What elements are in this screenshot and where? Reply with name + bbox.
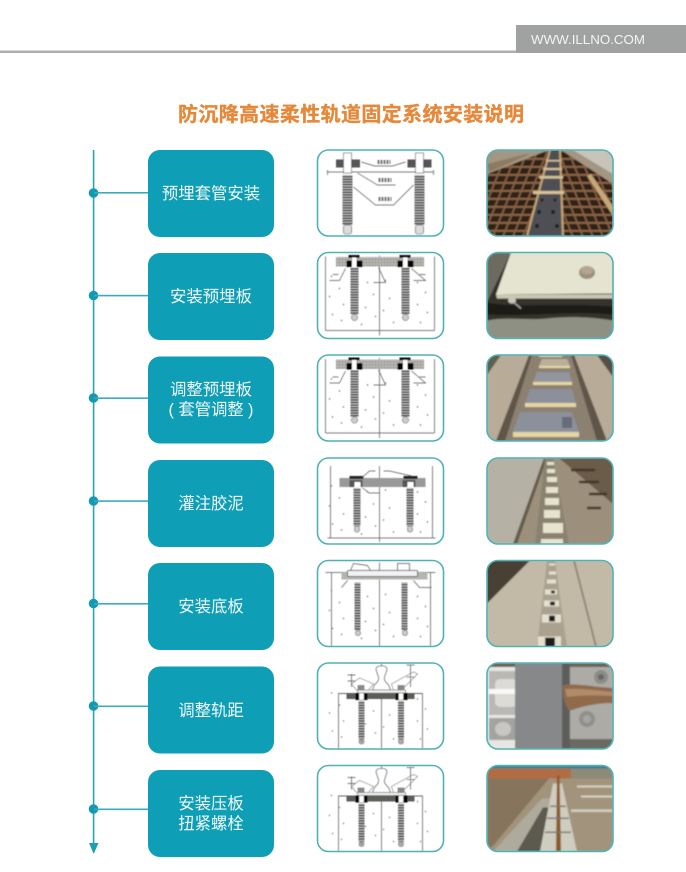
photo 6: rail and gauge tool bbox=[487, 663, 613, 749]
header rule and website tag: WWW.ILLNO.COM bbox=[531, 32, 645, 47]
photo 2: plate close-up bbox=[487, 252, 613, 338]
step 5 label bbox=[148, 563, 274, 650]
photo 5: installed base plates bbox=[487, 560, 613, 646]
step 1 label: 预埋套管安装 bbox=[162, 185, 260, 203]
header rule and website tag bbox=[0, 25, 686, 53]
step 3 label: 调整预埋板 bbox=[170, 381, 252, 399]
step 7 label bbox=[148, 770, 274, 857]
step 6 label: 调整轨距 bbox=[178, 702, 244, 720]
diagram 6: rail gauge adjustment bbox=[318, 663, 444, 749]
step 7 label: 安装压板 bbox=[178, 795, 244, 813]
photo 7: finished track bed bbox=[487, 766, 613, 852]
step 4 label bbox=[148, 460, 274, 547]
diagram 1: embedded sleeves bbox=[318, 150, 444, 236]
step 3 label: ( 套管调整 ) bbox=[168, 401, 254, 419]
step 2 label: 安装预埋板 bbox=[170, 288, 252, 306]
step 3 label bbox=[148, 356, 274, 444]
step 1 label bbox=[148, 150, 274, 237]
diagram 5: base plate bbox=[318, 560, 444, 646]
timeline arrow bbox=[89, 150, 149, 854]
diagram 7: clamp plate and bolts bbox=[318, 766, 444, 852]
step 2 label bbox=[148, 253, 274, 340]
diagram 4: grouting bbox=[318, 458, 444, 544]
step 7 label: 扭紧螺栓 bbox=[178, 815, 244, 833]
step 4 label: 灌注胶泥 bbox=[178, 495, 244, 513]
step 5 label: 安装底板 bbox=[178, 598, 244, 616]
step 6 label bbox=[148, 666, 274, 754]
photo 3: plates in trench bbox=[487, 355, 613, 441]
diagram 2: embedded plate bbox=[318, 252, 444, 338]
title: 防沉降高速柔性轨道固定系统安装说明 bbox=[178, 102, 524, 126]
photo 4: grouted pockets bbox=[487, 458, 613, 544]
photo 1: rebar cage bbox=[487, 150, 613, 236]
diagram 3: plate adjustment bbox=[318, 355, 444, 441]
